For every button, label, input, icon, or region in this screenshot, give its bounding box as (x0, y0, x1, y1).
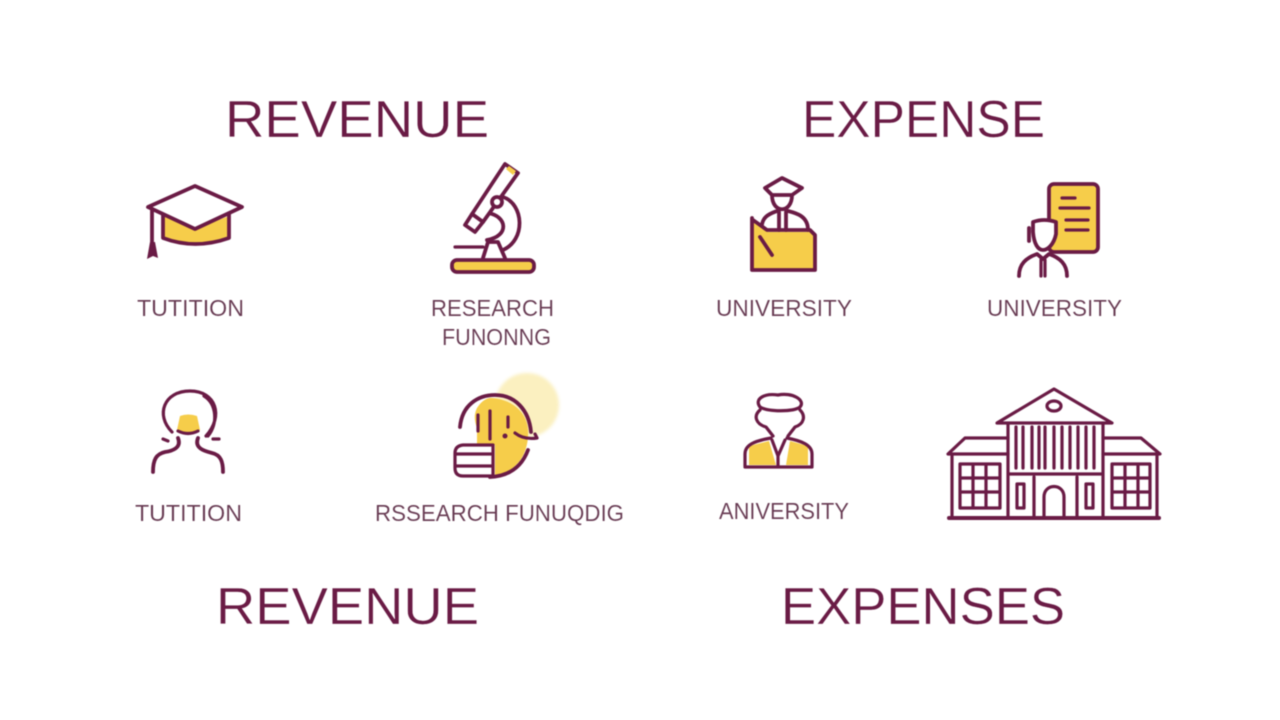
label: tutition bottom: TUTITION (135, 500, 242, 526)
icon: microscope (452, 164, 534, 272)
heading: revenue bottom: REVENUE (216, 578, 479, 636)
label: anniversity: ANIVERSITY (719, 498, 849, 524)
icon: person with document (1019, 184, 1098, 276)
icon: coin stack with glow (455, 373, 559, 477)
heading: revenue top: REVENUE (225, 91, 489, 149)
heading: expense top: EXPENSE (802, 91, 1045, 149)
label: research funding top (431, 295, 554, 350)
label: tutition top: TUTITION (137, 295, 244, 321)
label: research funding bottom: RSSEARCH FUNUQDIG (375, 500, 624, 526)
icon: person with tie (745, 394, 812, 467)
icon: university building (948, 389, 1160, 518)
icon: graduation cap (147, 186, 242, 259)
label: research funding top: FUNONNG (442, 324, 551, 350)
label: research funding top: RESEARCH (431, 295, 554, 321)
icon: professor at folder (752, 178, 815, 270)
label: university two: UNIVERSITY (987, 295, 1122, 321)
label: university one: UNIVERSITY (716, 295, 852, 321)
heading: expenses bottom: EXPENSES (781, 578, 1065, 636)
icon: person with head circle (153, 391, 223, 472)
